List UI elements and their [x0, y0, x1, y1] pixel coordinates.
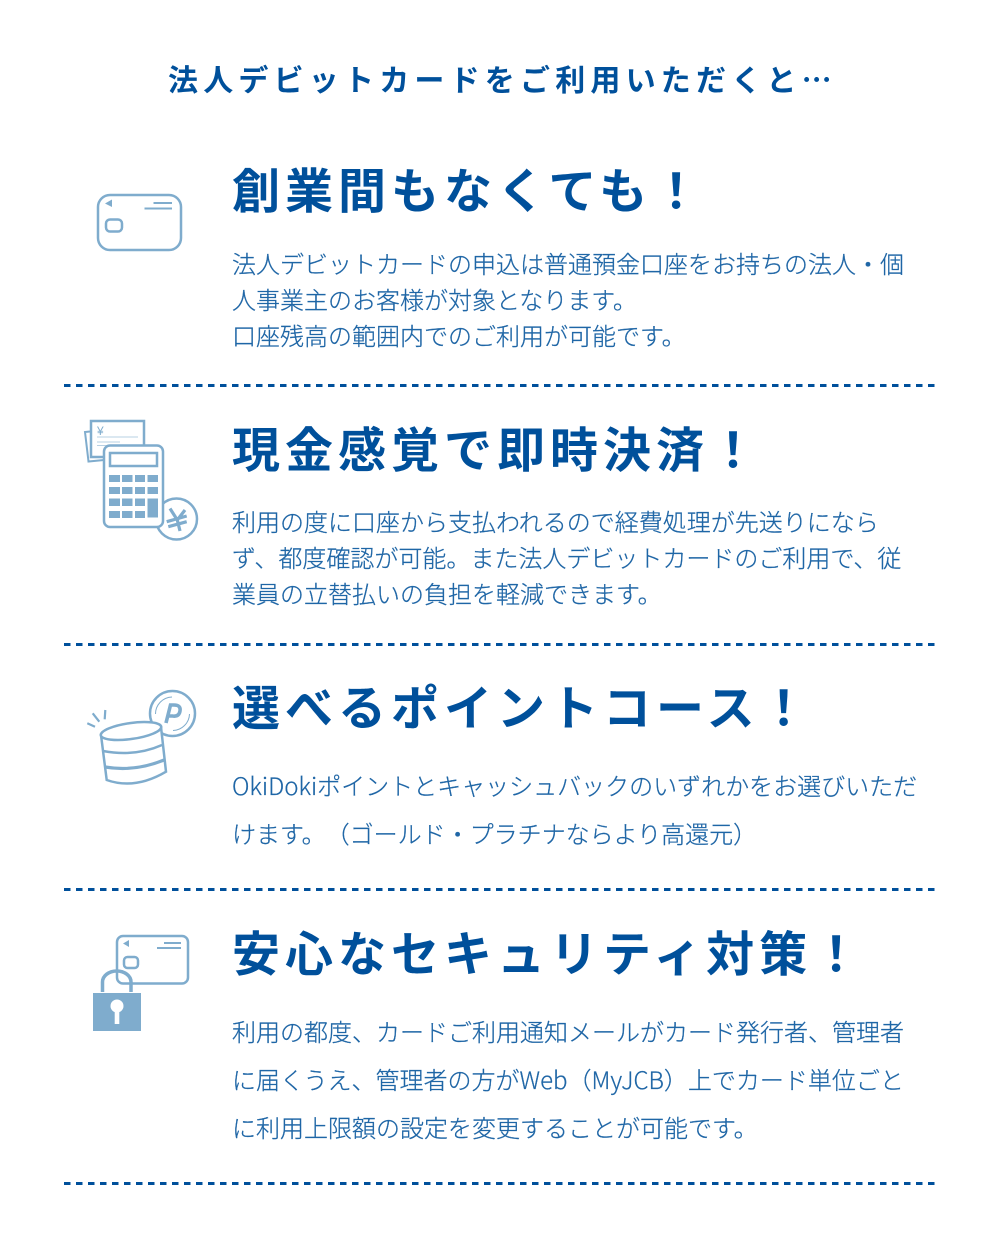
text: item 1: 人事業主のお客様が対象となります。	[232, 281, 637, 316]
text: item 3: けます。（ゴールド・プラチナならより高還元）	[232, 815, 757, 850]
heading: item 2: 現金感覚で即時決済！	[232, 411, 762, 481]
text: item 4	[232, 1013, 904, 1144]
icon: card	[96, 194, 182, 252]
text: item 1	[232, 245, 904, 352]
text: item 2	[232, 503, 901, 610]
text: item 2: ず、都度確認が可能。また法人デビットカードのご利用で、従	[232, 539, 901, 574]
heading: item 3: 選べるポイントコース！	[232, 669, 813, 739]
icon: calculator with yen: ¥	[96, 424, 104, 438]
title: 法人デビットカードをご利用いただくと…	[168, 56, 837, 100]
text: item 1: 口座残高の範囲内でのご利用が可能です。	[232, 317, 686, 352]
icon: calculator with yen	[84, 420, 198, 541]
text: item 2: 業員の立替払いの負担を軽減できます。	[232, 575, 662, 610]
text: item 3	[232, 767, 917, 850]
text: item 2: 利用の度に口座から支払われるので経費処理が先送りになら	[232, 503, 879, 538]
heading: item 1: 創業間もなくても！	[232, 152, 705, 222]
icon: points coins	[86, 690, 196, 785]
text: item 4: 利用の都度、カードご利用通知メールがカード発行者、管理者	[232, 1013, 904, 1048]
heading: item 4: 安心なセキュリティ対策！	[232, 915, 865, 985]
text: item 3: OkiDokiポイントとキャッシュバックのいずれかをお選びいただ	[232, 767, 917, 802]
text: item 4: に利用上限額の設定を変更することが可能です。	[232, 1109, 758, 1144]
text: item 4: に届くうえ、管理者の方がWeb（MyJCB）上でカード単位ごと	[232, 1061, 904, 1096]
text: item 1: 法人デビットカードの申込は普通預金口座をお持ちの法人・個	[232, 245, 904, 280]
